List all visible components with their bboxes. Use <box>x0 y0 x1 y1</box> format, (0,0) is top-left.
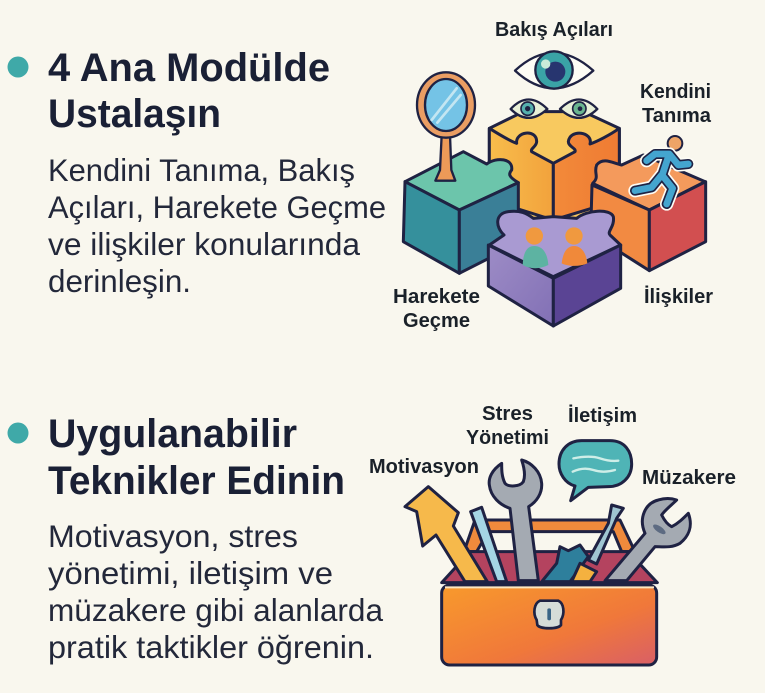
labels: toolbox: Stres <box>482 402 533 425</box>
labels: toolbox: Yönetimi <box>466 426 549 449</box>
icon: screwdriver left <box>471 507 507 582</box>
body text: techniques: pratik taktikler öğrenin. <box>48 629 374 665</box>
icon: small eyes <box>511 99 597 118</box>
labels: puzzle: Kendini <box>640 80 711 103</box>
body text: modules: Kendini Tanıma, Bakış <box>48 152 355 188</box>
puzzle illustration <box>403 51 706 326</box>
heading: techniques <box>48 412 345 503</box>
labels: toolbox: İletişim <box>568 404 637 427</box>
icon: speech bubble <box>559 441 632 501</box>
icon: arrow <box>405 487 487 582</box>
toolbox interior <box>442 552 657 583</box>
section: 4 modules text <box>8 46 386 299</box>
labels: puzzle: Bakış Açıları <box>495 18 613 41</box>
labels: puzzle: İlişkiler <box>644 285 713 308</box>
icon: teal tool <box>542 545 588 582</box>
bullet dot <box>8 56 28 78</box>
labels: puzzle: Tanıma <box>642 104 712 127</box>
labels: toolbox: Müzakere <box>642 466 736 489</box>
body text: techniques: yönetimi, iletişim ve <box>48 555 333 591</box>
body text: techniques <box>48 518 383 665</box>
labels: toolbox: Motivasyon <box>369 455 479 478</box>
labels: puzzle: Harekete <box>393 285 480 308</box>
icon: lock <box>534 601 563 628</box>
icon: small wrench <box>605 499 690 581</box>
body text: modules: derinleşin. <box>48 263 191 299</box>
toolbox handle <box>464 520 635 552</box>
body text: modules: Açıları, Harekete Geçme <box>48 189 386 225</box>
icon: large wrench <box>489 460 542 581</box>
icon: screwdriver right <box>572 505 623 582</box>
body text: modules <box>48 152 386 299</box>
labels: puzzle: Geçme <box>403 309 470 332</box>
icon: large eye <box>515 51 593 89</box>
puzzle piece: teal block with mirror <box>403 152 518 273</box>
heading: modules <box>48 46 330 136</box>
body text: techniques: müzakere gibi alanlarda <box>48 592 383 628</box>
toolbox illustration <box>405 441 690 665</box>
section: techniques text <box>8 412 383 665</box>
heading: modules: 4 Ana Modülde <box>48 46 330 90</box>
heading: techniques: Teknikler Edinin <box>48 459 345 503</box>
body text: modules: ve ilişkiler konularında <box>48 226 360 262</box>
heading: techniques: Uygulanabilir <box>48 412 297 456</box>
icon: two people <box>523 227 587 268</box>
heading: modules: Ustalaşın <box>48 92 221 136</box>
toolbox body <box>442 585 657 665</box>
icon: running figure <box>635 136 688 204</box>
puzzle piece: yellow and orange block <box>489 112 619 230</box>
icon: mirror <box>417 72 475 181</box>
body text: techniques: Motivasyon, stres <box>48 518 298 554</box>
labels: toolbox <box>369 402 736 489</box>
puzzle piece: purple block <box>488 211 621 326</box>
bullet dot <box>8 422 28 444</box>
labels: puzzle <box>393 18 713 332</box>
puzzle piece: orange red block <box>591 155 706 271</box>
